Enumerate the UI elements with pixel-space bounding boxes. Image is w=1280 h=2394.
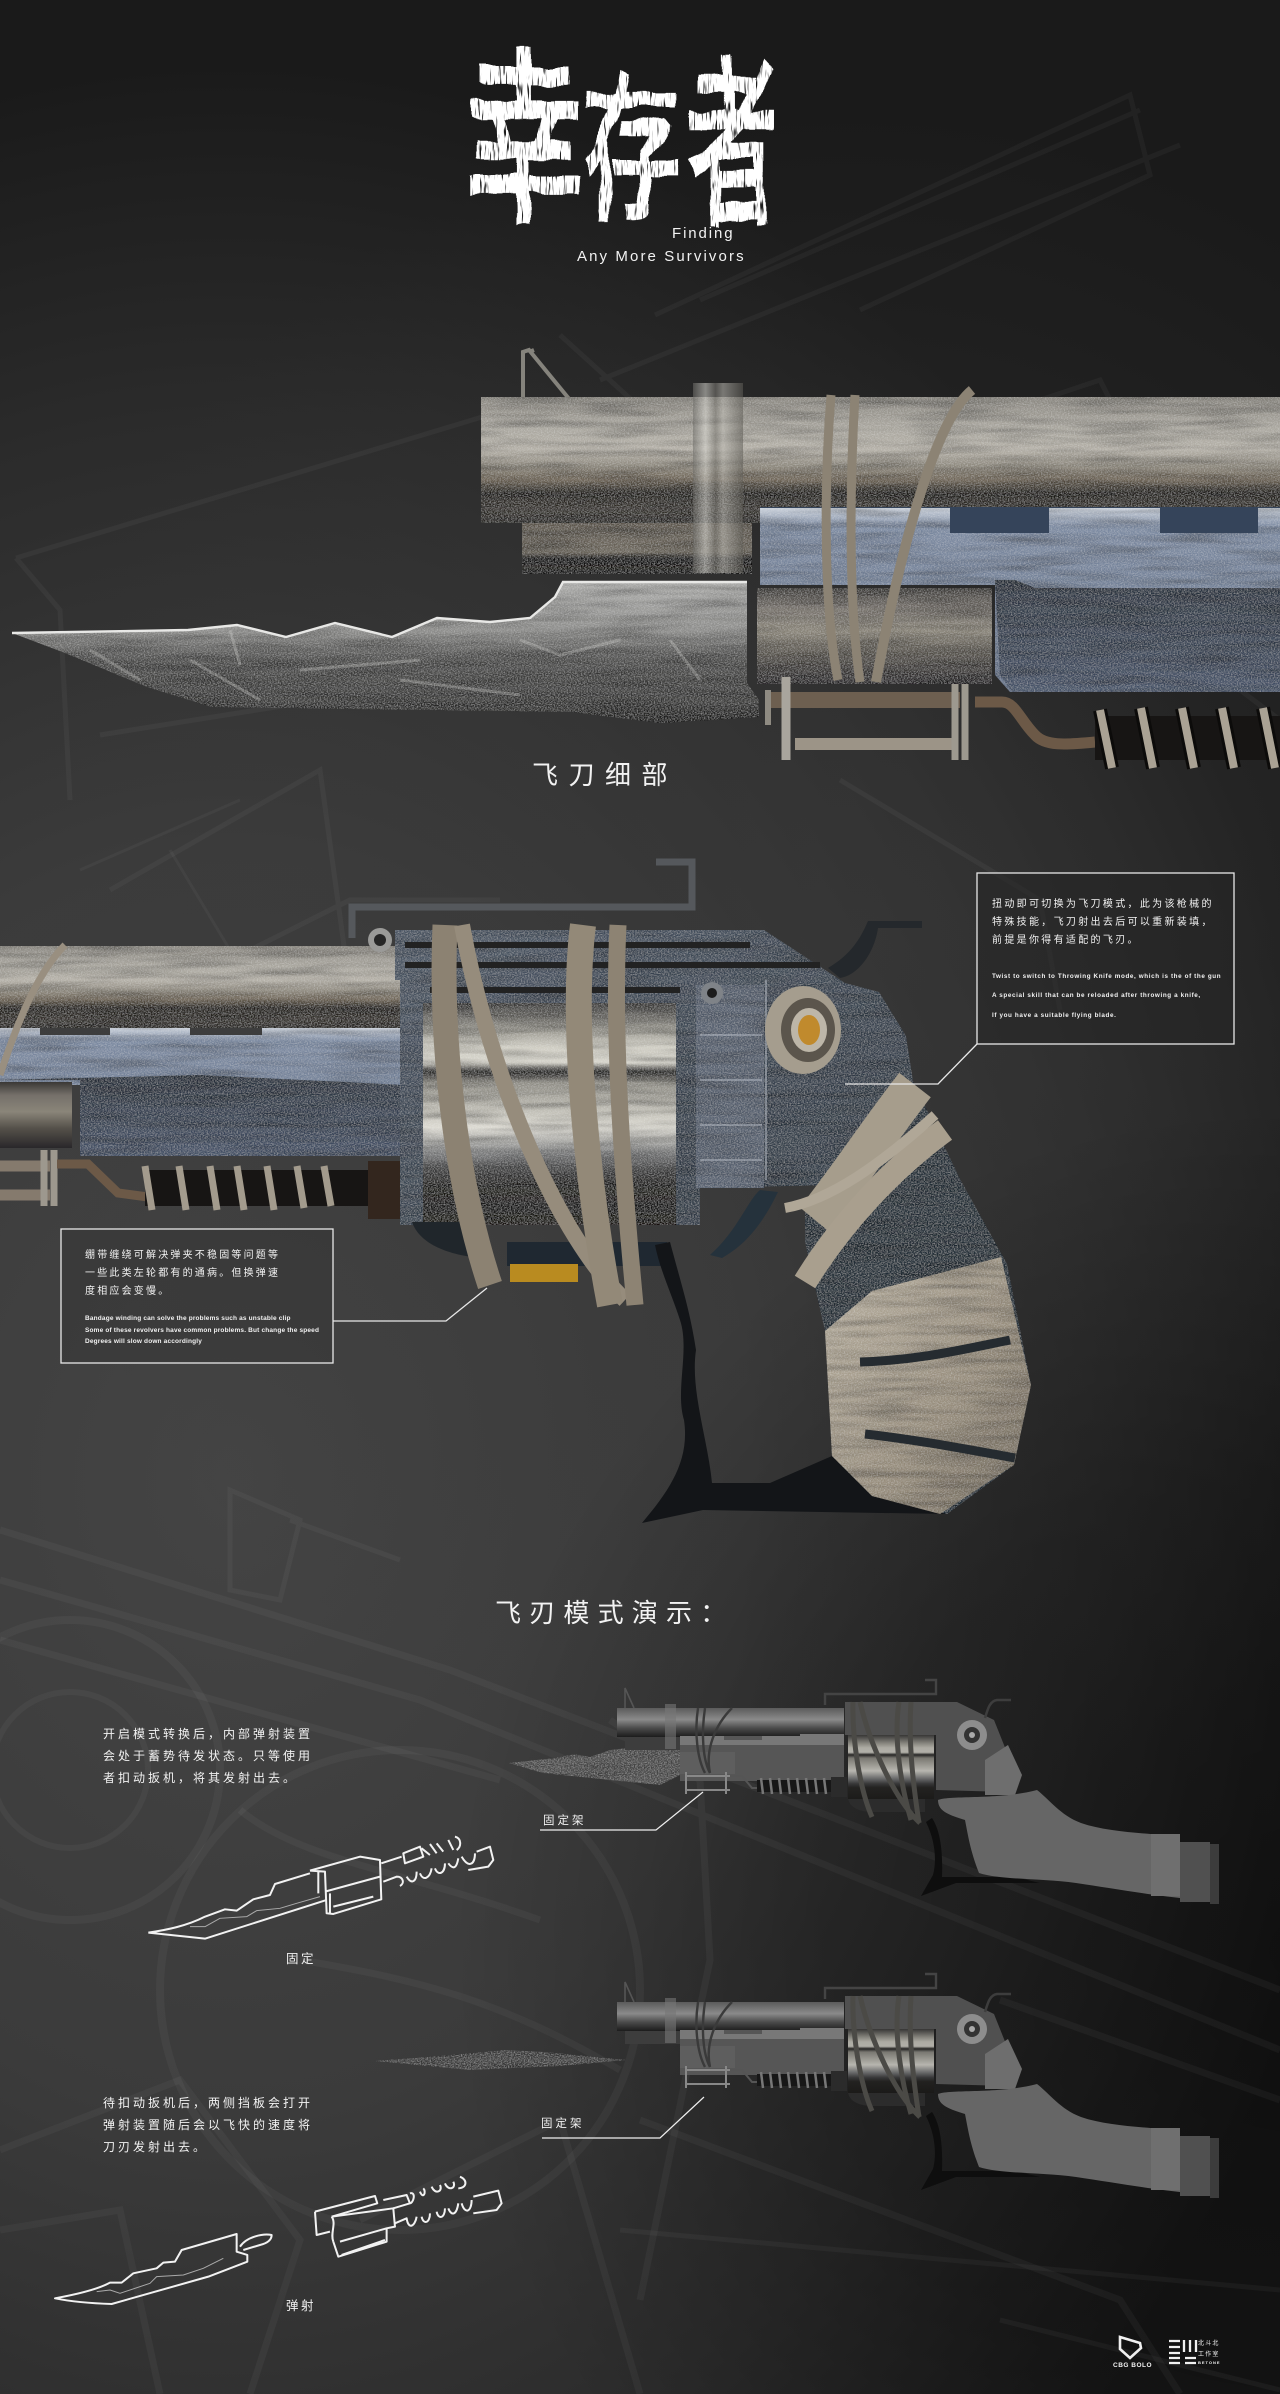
trigger guard <box>642 1242 947 1523</box>
callout: bandage winding: Some of these revolvers have common problems. But change the speed <box>85 1327 319 1334</box>
receiver dark panel <box>995 580 1280 692</box>
bandage wires <box>826 390 972 682</box>
trigger <box>710 1190 778 1258</box>
logo: BETONE studio: BETONE <box>1198 2360 1221 2365</box>
text: mode switch description: 开启模式转换后，内部弹射装置 <box>103 1726 313 1741</box>
barrel <box>481 397 1280 523</box>
logo: CBG BOLO: CBG BOLO <box>1113 2362 1152 2369</box>
text: firing description: 待扣动扳机后，两侧挡板会打开 <box>103 2096 313 2110</box>
flying blade motion <box>374 2050 626 2070</box>
title: 幸 <box>464 38 584 249</box>
barrel ring <box>693 383 743 573</box>
bracket rods <box>768 677 1095 760</box>
rear bracket and spring <box>0 1150 370 1210</box>
yellow part <box>510 1264 578 1282</box>
small blade <box>509 1742 680 1785</box>
callout: twist to throwing knife mode: 前提是你得有适配的飞刃。 <box>992 933 1140 946</box>
callout: bandage winding: Bandage winding can solve the problems such as unstable clip <box>85 1315 291 1322</box>
heading: flying blade demo: 飞刃模式演示： <box>495 1598 734 1628</box>
title: 存 <box>582 63 679 239</box>
callout: bandage winding: Degrees will slow down accordingly <box>85 1338 202 1345</box>
line art: fixed blade <box>148 1837 493 1939</box>
label: fixed: 固定 <box>286 1951 316 1966</box>
line art: ejected blade <box>55 2177 502 2304</box>
label: fixing frame 1: 固定架 <box>543 1813 586 1827</box>
label: fixing frame 2: 固定架 <box>541 2116 584 2130</box>
subtitle: Finding <box>672 225 734 242</box>
subtitle: Any More Survivors <box>577 248 746 265</box>
callout: bandage winding: 绷带缠绕可解决弹夹不稳固等问题等 <box>85 1248 280 1261</box>
callout: twist to throwing knife mode <box>845 873 1234 1084</box>
grip dark stripes <box>860 1340 1015 1458</box>
top rail highlights <box>405 945 820 990</box>
blade etching <box>90 630 700 700</box>
rear plate panel <box>696 985 764 1188</box>
screw <box>701 982 723 1004</box>
callout: bandage winding: 一些此类左轮都有的通病。但换弹速 <box>85 1266 280 1279</box>
callout: twist to throwing knife mode: Twist to switch to Throwing Knife mode, which is the of the gun <box>992 973 1221 980</box>
title: 者 <box>688 45 779 247</box>
text: mode switch description: 会处于蓄势待发状态。只等使用 <box>103 1748 313 1763</box>
grip bandage lower <box>825 1257 1031 1514</box>
subtitle <box>577 225 746 265</box>
small gun in hand: fixed state <box>509 1680 1219 1904</box>
text: firing description <box>103 2096 313 2154</box>
dial with gold centre <box>765 986 841 1074</box>
gun frame <box>395 930 913 1225</box>
receiver <box>0 1028 405 1156</box>
blade <box>12 582 759 723</box>
grip core <box>805 1081 1031 1514</box>
heading: knife details: 飞刀细部 <box>532 760 678 790</box>
text: firing description: 弹射装置随后会以飞快的速度将 <box>103 2117 313 2132</box>
logo: BETONE studio: 北斗北 <box>1198 2339 1220 2347</box>
under cylinder bowl <box>412 1222 480 1258</box>
gun: revolver body <box>0 862 1031 1523</box>
cylinder <box>423 1003 676 1225</box>
spring <box>1095 708 1280 768</box>
top screw <box>368 928 392 952</box>
gun and hand <box>617 1680 1219 1904</box>
knurled block <box>757 588 992 684</box>
logo: BETONE studio <box>1169 2339 1221 2365</box>
spring block <box>368 1161 414 1219</box>
gun detail: throwing knife close-up <box>12 350 1280 768</box>
under bar <box>507 1242 667 1266</box>
logo: BETONE studio: 工作室 <box>1198 2350 1220 2358</box>
plate lines <box>700 980 766 1180</box>
text: firing description: 刀刃发射出去。 <box>103 2139 208 2154</box>
cylinder straps <box>0 925 635 1305</box>
top wire frame <box>352 862 692 938</box>
receiver lower panel <box>0 1075 405 1156</box>
label: ejected: 弹射 <box>286 2298 316 2313</box>
knurl stub <box>0 1082 72 1148</box>
callout: bandage winding: 度相应会变慢。 <box>85 1284 170 1297</box>
lower tube <box>522 520 752 574</box>
callout: bandage winding <box>61 1229 487 1363</box>
small gun in hand: fired state <box>617 1974 1219 2198</box>
hammer <box>828 921 922 978</box>
receiver notch shadow <box>760 507 1280 537</box>
barrel <box>0 946 405 1028</box>
callout: twist to throwing knife mode: 特殊技能，飞刀射出去后可以重新装填， <box>992 915 1214 928</box>
callout: twist to throwing knife mode: A special skill that can be reloaded after throwing a knife, <box>992 992 1201 999</box>
label: fixing frame 2 <box>541 2097 704 2138</box>
sight wire <box>523 350 570 400</box>
callout: twist to throwing knife mode: If you have a suitable flying blade. <box>992 1012 1116 1019</box>
blue receiver <box>760 508 1280 692</box>
text: mode switch description: 者扣动扳机，将其发射出去。 <box>103 1770 298 1785</box>
grip bandage upper wraps <box>785 1085 945 1282</box>
label: fixing frame 1 <box>540 1792 703 1830</box>
blade upper edge <box>12 582 747 637</box>
text: mode switch description <box>103 1726 313 1785</box>
title <box>464 38 779 249</box>
callout: twist to throwing knife mode: 扭动即可切换为飞刀模式，此为该枪械的 <box>992 897 1214 910</box>
logo: CBG BOLO <box>1113 2337 1152 2369</box>
